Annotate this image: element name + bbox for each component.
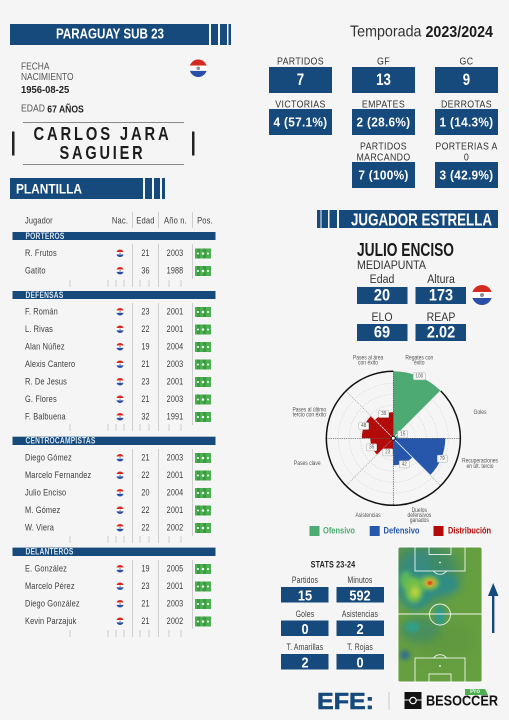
stat: Partidos: 7 bbox=[297, 71, 304, 89]
row: Alan Núñez: 2004 bbox=[167, 340, 183, 352]
row: E. González: 19 bbox=[141, 562, 150, 574]
row: L. Rivas: 2001 bbox=[167, 323, 183, 334]
season stat: Minutos: Minutos bbox=[348, 575, 372, 585]
row: Diego González: 21 bbox=[141, 597, 150, 609]
row: M. Gómez: 22 bbox=[141, 504, 150, 515]
coach birth date and age: FECHA bbox=[21, 61, 50, 73]
row: M. Gómez: M. Gómez bbox=[25, 504, 60, 515]
coach birth date and age: 1956-08-25 bbox=[21, 85, 70, 96]
icon: Paraguay flag bbox=[190, 60, 207, 77]
row: F. Balbuena: F. Balbuena bbox=[25, 410, 66, 422]
player stat: Altura: 173 bbox=[429, 286, 453, 305]
row: R. Frutos: 2003 bbox=[167, 247, 183, 258]
season stat: T. Amarillas: T. Amarillas bbox=[287, 642, 323, 652]
season stat: T. Amarillas: 2 bbox=[301, 653, 309, 671]
heatmap pitch bbox=[398, 546, 482, 682]
row: R. De Jesus: 2001 bbox=[167, 375, 183, 387]
section band: Defensas bbox=[12, 290, 216, 300]
stat: Empates: 2 (28.6%) bbox=[357, 115, 410, 130]
radar value tags: 100 bbox=[415, 373, 423, 380]
stat: Partidos: PARTIDOS bbox=[277, 55, 324, 67]
row: F. Román: F. Román bbox=[25, 305, 58, 317]
star player name and position: JULIO ENCISO bbox=[357, 240, 454, 260]
row: Kevin Parzajuk: Kevin Parzajuk bbox=[25, 615, 77, 626]
stat: Partidos marcando: PARTIDOS bbox=[360, 140, 407, 152]
player stat: ELO: ELO bbox=[371, 312, 393, 324]
season stat: Partidos bbox=[281, 575, 328, 604]
stat: GC bbox=[435, 55, 498, 93]
row: F. Román: 23 bbox=[141, 305, 150, 317]
season stat: T. Rojas: 0 bbox=[356, 653, 364, 671]
radar value tags: 15 bbox=[400, 431, 405, 438]
radar value tags bbox=[359, 373, 447, 468]
stat: Derrotas: DERROTAS bbox=[441, 98, 492, 110]
row: F. Román bbox=[25, 305, 211, 317]
row: Marcelo Pérez: 23 bbox=[141, 580, 150, 591]
stat: Empates: EMPATES bbox=[362, 98, 405, 110]
radar axis labels: éxito bbox=[414, 360, 425, 367]
row: Marcelo Fernandez: 22 bbox=[141, 469, 150, 480]
row: W. Viera: W. Viera bbox=[25, 521, 54, 533]
section band: Delanteros bbox=[12, 547, 216, 557]
logo: BeSoccer Pro bbox=[404, 689, 498, 710]
table column headers: Jugador bbox=[25, 214, 53, 226]
header bar: Paraguay Sub 23: PARAGUAY SUB 23 bbox=[56, 26, 164, 42]
radar axis labels: en últ. tercio bbox=[466, 463, 494, 470]
player stat: Altura bbox=[416, 274, 466, 305]
radar axis labels: Asistencias bbox=[355, 513, 381, 519]
table column headers: Pos. bbox=[197, 214, 213, 226]
stat: Partidos marcando: MARCANDO bbox=[356, 151, 411, 163]
row: Julio Enciso bbox=[25, 486, 211, 498]
stat: GF: GF bbox=[377, 55, 390, 67]
season stat: T. Rojas: T. Rojas bbox=[347, 642, 373, 652]
radar axis labels: tercio con éxito bbox=[293, 412, 326, 419]
stat: Derrotas: 1 (14.3%) bbox=[440, 115, 493, 130]
row: L. Rivas: 22 bbox=[141, 323, 150, 334]
row: Marcelo Pérez: Marcelo Pérez bbox=[25, 580, 75, 591]
logo: BeSoccer Pro: BESOCCER bbox=[426, 692, 498, 710]
row: R. De Jesus: R. De Jesus bbox=[25, 375, 67, 387]
row: Alexis Cantero: Alexis Cantero bbox=[25, 358, 75, 369]
coach name bbox=[12, 122, 194, 164]
row: E. González: E. González bbox=[25, 562, 67, 574]
row: Gatito: Gatito bbox=[25, 264, 46, 276]
season stat: Partidos: Partidos bbox=[292, 575, 318, 585]
season stat: Goles: Goles bbox=[296, 609, 314, 619]
row: R. De Jesus bbox=[25, 375, 211, 387]
row: L. Rivas bbox=[25, 323, 211, 334]
row: Kevin Parzajuk: 2002 bbox=[167, 615, 183, 626]
stat: Porterias a 0: 0 bbox=[464, 151, 469, 163]
row: R. Frutos: R. Frutos bbox=[25, 247, 57, 258]
stat: Porterias a 0 bbox=[435, 140, 498, 188]
stat: Victorias: VICTORIAS bbox=[275, 98, 326, 110]
row: Alexis Cantero: 21 bbox=[141, 358, 150, 369]
row: E. González bbox=[25, 562, 211, 574]
season stat: Minutos bbox=[336, 575, 384, 604]
row: Alan Núñez bbox=[25, 340, 211, 352]
radar axis labels: defensivos bbox=[407, 513, 431, 519]
row: Marcelo Fernandez bbox=[25, 469, 211, 480]
player stat: REAP: REAP bbox=[427, 312, 455, 324]
radar legend: Defensivo bbox=[384, 526, 420, 536]
star player name and position: MEDIAPUNTA bbox=[357, 258, 426, 272]
season stat: T. Amarillas bbox=[281, 642, 328, 671]
player stat: Edad: Edad bbox=[370, 274, 394, 286]
table column headers: Edad bbox=[136, 214, 155, 226]
player stat: Edad: 20 bbox=[374, 286, 390, 305]
section band: Delanteros: DELANTEROS bbox=[26, 547, 74, 557]
stat: GF bbox=[352, 55, 415, 93]
arrow: attack direction bbox=[488, 583, 498, 633]
table column headers: Nac. bbox=[112, 214, 128, 226]
radar axis labels: Pases clave bbox=[294, 461, 321, 467]
coach name: SAGUIER bbox=[60, 143, 146, 163]
stat: Partidos bbox=[269, 55, 332, 93]
row: M. Gómez bbox=[25, 504, 211, 516]
stat: Empates bbox=[352, 98, 415, 135]
radar value tags: 23 bbox=[385, 449, 390, 456]
radar chart bbox=[292, 355, 498, 524]
player stat: Edad bbox=[357, 274, 408, 305]
radar axis labels: Recuperaciones bbox=[462, 458, 498, 465]
season stat: Asistencias bbox=[336, 609, 384, 637]
logo: BeSoccer Pro: Pro bbox=[470, 689, 480, 695]
coach name: CARLOS JARA bbox=[34, 124, 172, 144]
stat: Partidos marcando: 7 (100%) bbox=[358, 168, 409, 183]
section band: Porteros bbox=[12, 231, 216, 241]
stat: GC: GC bbox=[460, 55, 473, 67]
radar axis labels: Regates con bbox=[405, 355, 433, 362]
coach birth date and age: EDAD 67 AÑOS bbox=[21, 103, 84, 115]
row: F. Balbuena bbox=[25, 410, 211, 422]
icon: player flag bbox=[472, 285, 492, 305]
radar axis labels: Duelos bbox=[412, 508, 427, 514]
season title: Temporada 2023/2024 bbox=[350, 24, 493, 40]
player stat: REAP: 2.02 bbox=[427, 323, 455, 342]
stat: GC: 9 bbox=[463, 71, 470, 89]
section band: Defensas: DEFENSAS bbox=[26, 290, 64, 300]
row: G. Flores bbox=[25, 393, 211, 404]
row: W. Viera: 2002 bbox=[167, 521, 183, 533]
row: F. Balbuena: 32 bbox=[141, 410, 150, 422]
coach birth date and age: NACIMIENTO bbox=[21, 71, 74, 83]
row: Alan Núñez: Alan Núñez bbox=[25, 340, 65, 352]
row: Gatito: 1988 bbox=[167, 264, 183, 276]
row: G. Flores: G. Flores bbox=[25, 393, 57, 404]
radar value tags: 42 bbox=[402, 461, 407, 468]
row: E. González: 2005 bbox=[167, 562, 183, 574]
radar value tags: 39 bbox=[381, 411, 386, 417]
season stat: T. Rojas bbox=[336, 642, 384, 671]
radar legend: Distribución bbox=[448, 526, 491, 536]
row: W. Viera: 22 bbox=[141, 521, 150, 533]
logo: EFE: EFE: bbox=[317, 688, 374, 714]
radar legend: Ofensivo bbox=[323, 526, 355, 536]
table column headers bbox=[25, 212, 213, 228]
row: Marcelo Fernandez: 2001 bbox=[167, 469, 183, 480]
row: Diego González: Diego González bbox=[25, 597, 80, 609]
stat: Porterias a 0: 3 (42.9%) bbox=[440, 168, 493, 183]
heading: Plantilla bbox=[10, 178, 165, 199]
row: Alan Núñez: 19 bbox=[141, 340, 150, 352]
row: Julio Enciso: 20 bbox=[141, 486, 150, 498]
row: Alexis Cantero bbox=[25, 358, 211, 370]
row: W. Viera bbox=[25, 521, 211, 533]
row: Diego González: 2003 bbox=[167, 597, 183, 609]
table column headers: Año n. bbox=[164, 214, 187, 226]
row: Alexis Cantero: 2003 bbox=[167, 358, 183, 369]
row: R. Frutos bbox=[25, 247, 211, 258]
stats title: STATS 23-24 bbox=[311, 558, 355, 570]
row: F. Balbuena: 1991 bbox=[167, 410, 183, 422]
radar legend bbox=[310, 526, 491, 536]
season stat: Asistencias: Asistencias bbox=[342, 609, 378, 619]
row: Kevin Parzajuk: 21 bbox=[141, 615, 150, 626]
section band: Centrocampistas bbox=[12, 436, 216, 446]
radar axis labels: Pases al último bbox=[292, 407, 326, 414]
radar value tags: 79 bbox=[440, 455, 445, 462]
row: Marcelo Pérez bbox=[25, 580, 211, 592]
season stat: Goles: 0 bbox=[301, 620, 309, 637]
season stat: Asistencias: 2 bbox=[356, 620, 364, 637]
row: Kevin Parzajuk bbox=[25, 615, 211, 626]
row: Diego Gómez: 2003 bbox=[167, 451, 183, 463]
radar axis labels: con éxito bbox=[358, 360, 378, 367]
player stat: ELO: 69 bbox=[374, 323, 390, 342]
divider bbox=[388, 692, 390, 710]
stat: Porterias a 0: PORTERIAS A bbox=[435, 140, 498, 152]
radar axis labels bbox=[292, 355, 498, 524]
radar axis labels: Goles bbox=[474, 410, 487, 416]
stat: Victorias bbox=[269, 98, 332, 135]
player stat: ELO bbox=[357, 312, 408, 342]
row: Diego Gómez: Diego Gómez bbox=[25, 451, 72, 463]
row: Marcelo Fernandez: Marcelo Fernandez bbox=[25, 469, 91, 480]
heading: Plantilla: PLANTILLA bbox=[16, 180, 82, 196]
coach birth date and age bbox=[21, 61, 84, 115]
row: R. Frutos: 21 bbox=[141, 247, 150, 258]
row: M. Gómez: 2001 bbox=[167, 504, 183, 515]
row: G. Flores: 21 bbox=[141, 393, 150, 404]
player stat: Altura: Altura bbox=[427, 274, 455, 286]
section band: Porteros: PORTEROS bbox=[26, 231, 65, 241]
star player name and position bbox=[357, 240, 454, 272]
header bar: Paraguay Sub 23 bbox=[10, 24, 231, 45]
stat: Derrotas bbox=[435, 98, 498, 135]
row: L. Rivas: L. Rivas bbox=[25, 323, 53, 334]
row: G. Flores: 2003 bbox=[167, 393, 183, 404]
row: Julio Enciso: 2004 bbox=[167, 486, 183, 498]
row: Marcelo Pérez: 2001 bbox=[167, 580, 183, 591]
season stat: Minutos: 592 bbox=[349, 586, 371, 604]
row: Diego Gómez bbox=[25, 451, 211, 463]
row: R. De Jesus: 23 bbox=[141, 375, 150, 387]
radar axis labels: ganados bbox=[410, 518, 429, 524]
row: Gatito bbox=[25, 264, 211, 276]
stat: Partidos marcando bbox=[352, 140, 415, 188]
row: Gatito: 36 bbox=[141, 264, 150, 276]
row: Julio Enciso: Julio Enciso bbox=[25, 486, 66, 498]
radar value tags: 48 bbox=[361, 423, 366, 429]
row: Diego González bbox=[25, 597, 211, 609]
season stat: Goles bbox=[281, 609, 328, 637]
section band: Centrocampistas: CENTROCAMPISTAS bbox=[26, 436, 96, 446]
stat: Victorias: 4 (57.1%) bbox=[274, 115, 327, 130]
row: Diego Gómez: 21 bbox=[141, 451, 150, 463]
radar axis labels: Pases al área bbox=[353, 355, 384, 362]
radar value tags: 35 bbox=[369, 444, 374, 451]
stat: GF: 13 bbox=[376, 71, 391, 89]
row: F. Román: 2001 bbox=[167, 305, 183, 317]
table column lines bbox=[70, 244, 192, 637]
player stat: REAP bbox=[416, 312, 466, 342]
season stat: Partidos: 15 bbox=[298, 586, 312, 604]
